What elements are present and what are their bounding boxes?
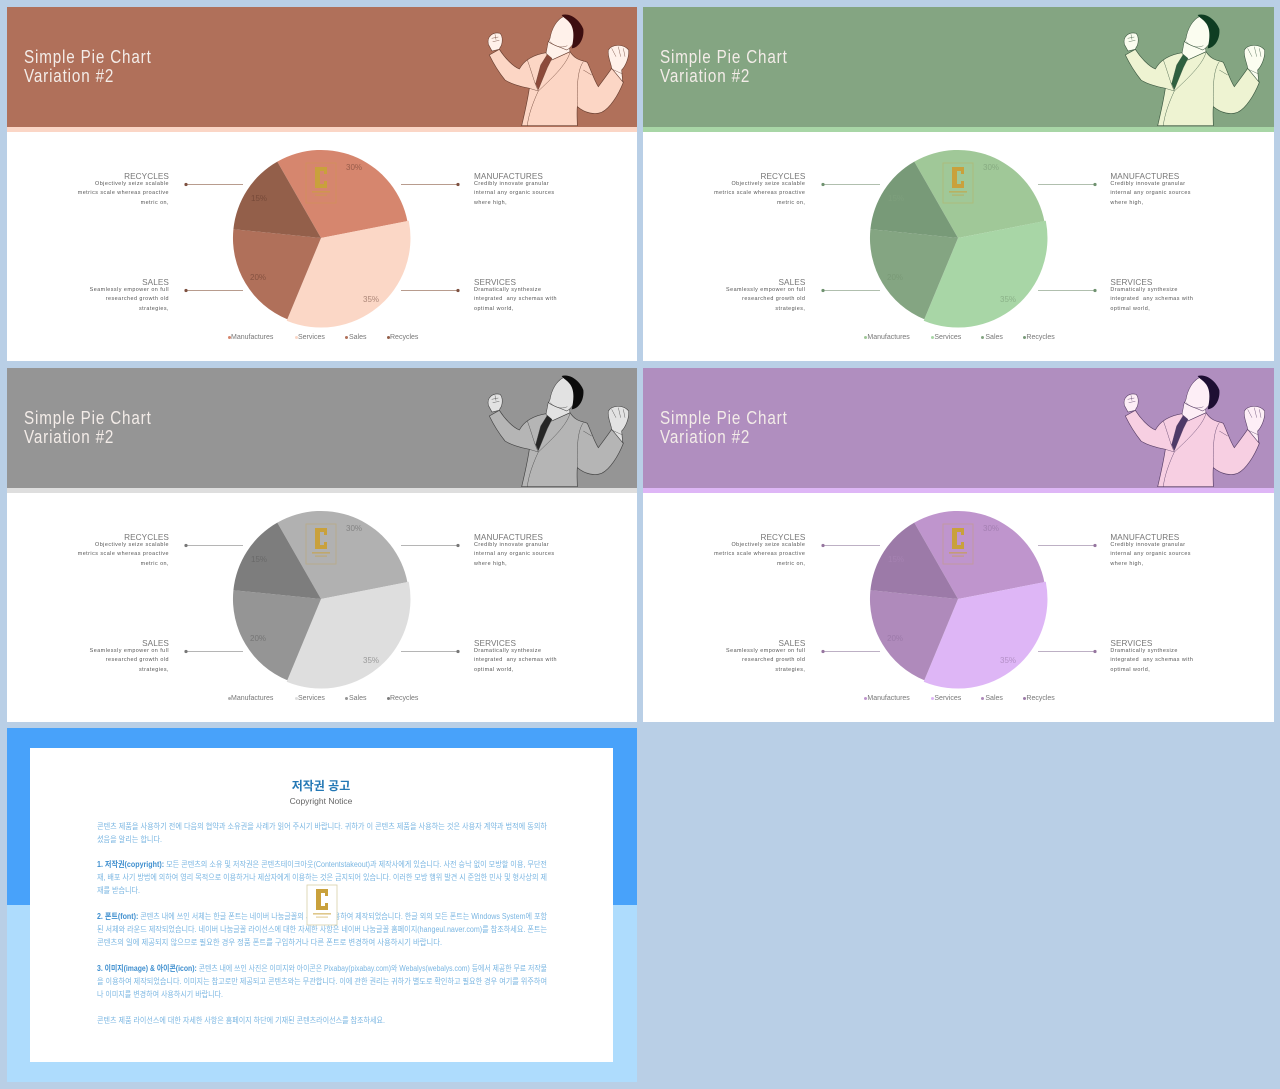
label: services: optimal world, bbox=[474, 666, 514, 672]
label: sales: Seamlessly empower on full bbox=[90, 648, 169, 654]
label: manufactures: Credibly innovate granular bbox=[474, 542, 549, 548]
pie chart: 15% bbox=[251, 194, 267, 203]
label: sales: strategies, bbox=[775, 306, 805, 312]
label: services: integrated any schemas with bbox=[474, 657, 557, 663]
accent strip bbox=[7, 127, 637, 132]
label: recycles bbox=[714, 533, 805, 566]
label: manufactures: Credibly innovate granular bbox=[474, 180, 549, 186]
pie chart bbox=[821, 511, 1097, 688]
label: services: integrated any schemas with bbox=[1110, 657, 1193, 663]
legend: Recycles bbox=[390, 334, 418, 340]
label: manufactures: where high, bbox=[474, 200, 507, 206]
label: sales: strategies, bbox=[775, 666, 805, 672]
pie chart: 30% bbox=[346, 524, 362, 533]
label: services: SERVICES bbox=[1110, 278, 1152, 287]
copyright card: 재를 받습니다. bbox=[97, 885, 140, 895]
accent strip bbox=[7, 488, 637, 493]
legend: Manufactures bbox=[231, 694, 273, 702]
copyright card: 나 이미지를 변경하여 사용하시기 바랍니다. bbox=[97, 989, 223, 999]
copyright card bbox=[30, 748, 613, 1062]
title: Variation #2 bbox=[660, 426, 750, 446]
label: services bbox=[474, 278, 557, 312]
label: services bbox=[474, 639, 557, 672]
legend: Sales bbox=[349, 334, 367, 340]
label: manufactures: Credibly innovate granular bbox=[1110, 542, 1186, 548]
label: manufactures: Credibly innovate granular bbox=[1110, 180, 1186, 186]
label: manufactures: MANUFACTURES bbox=[1110, 172, 1179, 181]
label: services: Dramatically synthesize bbox=[1110, 648, 1178, 654]
copyright card: 3. 이미지(image) & 아이콘(icon): 콘텐츠 내에 쓰인 사진은 이미지와 아이콘은 Pixabay(pixabay.com)와 Webalys(webalys.com) 등에서 제공한 무료 저작물 bbox=[97, 963, 547, 973]
label: recycles: metric on, bbox=[777, 200, 805, 206]
label: services: optimal world, bbox=[1110, 306, 1150, 312]
pie chart bbox=[184, 150, 460, 328]
panel: brown pie chart slide bbox=[7, 7, 637, 361]
label: sales: Seamlessly empower on full bbox=[726, 286, 805, 292]
copyright card: 셨음을 알리는 합니다. bbox=[97, 834, 162, 844]
label: sales: Seamlessly empower on full bbox=[90, 286, 169, 292]
legend: Sales bbox=[985, 694, 1003, 702]
label: sales: researched growth old bbox=[106, 296, 169, 302]
copyright card: 2. 폰트(font): 콘텐츠 내에 쓰인 서체는 한글 폰트는 네이버 나눔글꼴의 서체를 이용하여 제작되었습니다. 한글 외의 모든 폰트는 Windows System에 포함 bbox=[97, 911, 548, 921]
header band bbox=[7, 7, 637, 127]
title bbox=[660, 46, 788, 86]
pie chart: 30% bbox=[346, 163, 362, 172]
label: recycles: metrics scale whereas proactive bbox=[714, 551, 805, 557]
label: recycles: Objectively seize scalable bbox=[95, 542, 169, 548]
label: manufactures: where high, bbox=[1110, 200, 1143, 206]
pie chart: 35% bbox=[1000, 295, 1016, 304]
label: manufactures: internal any organic sources bbox=[1110, 551, 1191, 557]
panel: copyright notice bbox=[7, 728, 637, 1082]
label: manufactures: internal any organic sources bbox=[474, 551, 555, 557]
label: manufactures: internal any organic sources bbox=[474, 190, 555, 196]
label: recycles: Objectively seize scalable bbox=[95, 180, 169, 186]
copyright card: 콘텐츠 제품을 사용하기 전에 다음의 협약과 소유권을 사례가 읽어 주시기 바랍니다. 귀하가 이 콘텐츠 제품을 사용하는 것은 사용자 계약과 법적에 동의하 bbox=[97, 821, 548, 831]
pie chart: 15% bbox=[888, 555, 904, 564]
label: services bbox=[1110, 278, 1193, 312]
pie chart: 35% bbox=[1000, 656, 1016, 665]
panel: gray pie chart slide bbox=[7, 368, 637, 722]
label: services: Dramatically synthesize bbox=[474, 648, 541, 654]
panel: green pie chart slide bbox=[643, 7, 1274, 361]
label: recycles: Objectively seize scalable bbox=[731, 542, 805, 548]
header band bbox=[7, 368, 637, 488]
label: manufactures bbox=[474, 172, 555, 206]
legend bbox=[864, 334, 1055, 340]
legend: Services bbox=[934, 694, 961, 702]
label: recycles: RECYCLES bbox=[760, 172, 805, 181]
label: sales: SALES bbox=[778, 639, 805, 648]
label: services: integrated any schemas with bbox=[1110, 296, 1193, 302]
label: sales: researched growth old bbox=[106, 657, 169, 663]
title: Simple Pie Chart bbox=[24, 46, 151, 66]
label: sales: SALES bbox=[142, 278, 169, 287]
legend: Recycles bbox=[1026, 694, 1055, 702]
panel: purple pie chart slide bbox=[643, 368, 1274, 722]
label: recycles: Objectively seize scalable bbox=[731, 180, 805, 186]
pie chart: 30% bbox=[983, 163, 999, 172]
legend: Manufactures bbox=[231, 334, 273, 340]
accent strip bbox=[643, 127, 1274, 132]
label: manufactures: where high, bbox=[1110, 560, 1143, 566]
label: recycles: RECYCLES bbox=[124, 533, 169, 542]
label: recycles: metrics scale whereas proactive bbox=[78, 551, 169, 557]
copyright card: 을 이용하여 제작되었습니다. 이미지는 참고로만 제공되고 콘텐츠와는 무관합니다. 이에 관한 권리는 귀하가 별도로 확인하고 필요한 경우 여기를 위주하여 bbox=[97, 976, 547, 986]
legend: Services bbox=[298, 694, 325, 702]
label: services: SERVICES bbox=[1110, 639, 1152, 648]
label: services: Dramatically synthesize bbox=[474, 286, 541, 292]
pie chart: 20% bbox=[250, 634, 266, 643]
pie chart bbox=[184, 511, 460, 688]
legend: Sales bbox=[349, 694, 367, 702]
label: manufactures bbox=[1110, 533, 1191, 566]
legend bbox=[864, 694, 1055, 702]
copyright card: 콘텐츠 제품 라이선스에 대한 자세한 사항은 홈페이지 하단에 기재된 콘텐츠라이선스를 참조하세요. bbox=[97, 1015, 385, 1025]
blue upper background bbox=[7, 728, 637, 905]
label: sales bbox=[90, 278, 169, 312]
label: sales: researched growth old bbox=[742, 296, 805, 302]
pie chart: 35% bbox=[363, 656, 379, 665]
title: Variation #2 bbox=[660, 66, 750, 86]
label: recycles: RECYCLES bbox=[124, 172, 169, 181]
label: recycles bbox=[714, 172, 805, 206]
pie chart bbox=[821, 150, 1097, 328]
label: recycles: metric on, bbox=[141, 560, 169, 566]
legend: Sales bbox=[985, 334, 1003, 340]
legend bbox=[228, 694, 418, 702]
pie chart: 15% bbox=[251, 555, 267, 564]
legend: Services bbox=[298, 334, 325, 340]
copyright card: 1. 저작권(copyright): 모든 콘텐츠의 소유 및 저작권은 콘텐츠테이크아웃(Contentstakeout)과 제작사에게 있습니다. 사전 승낙 없이 모방할 이용, 무단전 bbox=[97, 859, 547, 869]
label: sales: SALES bbox=[778, 278, 805, 287]
title: Simple Pie Chart bbox=[24, 408, 151, 428]
label: recycles: metric on, bbox=[777, 560, 805, 566]
header band bbox=[643, 7, 1274, 127]
title: Simple Pie Chart bbox=[660, 46, 788, 66]
label: services: SERVICES bbox=[474, 639, 516, 648]
label: services: integrated any schemas with bbox=[474, 296, 557, 302]
copyright card: 된 서체와 라운드 제작되었습니다. 네이버 나눔글꼴 라이선스에 대한 자세한 사항은 네이버 나눔글꼴 홈페이지(hangeul.naver.com)를 참조하세요. 폰트는 bbox=[97, 924, 547, 934]
label: services bbox=[1110, 639, 1193, 672]
label: sales bbox=[726, 278, 805, 312]
label: sales: strategies, bbox=[139, 666, 169, 672]
copyright card: 저작권 공고 bbox=[292, 778, 350, 793]
legend: Services bbox=[934, 334, 961, 340]
label: manufactures: MANUFACTURES bbox=[1110, 533, 1179, 542]
label: recycles bbox=[78, 533, 169, 566]
pie chart: 15% bbox=[888, 194, 904, 203]
header band bbox=[643, 368, 1274, 488]
label: services: SERVICES bbox=[474, 278, 516, 287]
label: manufactures: MANUFACTURES bbox=[474, 533, 543, 542]
label: recycles: RECYCLES bbox=[760, 533, 805, 542]
label: manufactures: internal any organic sources bbox=[1110, 190, 1191, 196]
illustration: cheering businessman bbox=[488, 14, 629, 126]
title bbox=[24, 46, 151, 86]
legend bbox=[228, 334, 418, 340]
label: recycles: metric on, bbox=[141, 200, 169, 206]
title: Simple Pie Chart bbox=[660, 408, 788, 428]
label: sales: Seamlessly empower on full bbox=[726, 648, 805, 654]
label: recycles bbox=[78, 172, 169, 206]
legend: Recycles bbox=[390, 694, 418, 702]
label: sales: SALES bbox=[142, 639, 169, 648]
label: services: Dramatically synthesize bbox=[1110, 286, 1178, 292]
copyright card: 콘텐츠의 일에 제공되지 않으므로 필요한 경우 정품 폰트를 구입하거나 다른 폰트로 변경하여 사용하시기 바랍니다. bbox=[97, 937, 442, 947]
legend: Recycles bbox=[1026, 334, 1055, 340]
label: recycles: metrics scale whereas proactive bbox=[714, 190, 805, 196]
pie chart: 20% bbox=[887, 634, 903, 643]
title: Variation #2 bbox=[24, 426, 114, 446]
pie chart: 30% bbox=[983, 524, 999, 533]
pie chart: 20% bbox=[250, 273, 266, 282]
legend: Manufactures bbox=[867, 694, 910, 702]
label: services: optimal world, bbox=[1110, 666, 1150, 672]
label: sales bbox=[726, 639, 805, 672]
label: services: optimal world, bbox=[474, 306, 514, 312]
title bbox=[24, 408, 151, 446]
label: recycles: metrics scale whereas proactive bbox=[78, 190, 169, 196]
label: sales bbox=[90, 639, 169, 672]
pie chart: 20% bbox=[887, 273, 903, 282]
label: manufactures bbox=[1110, 172, 1191, 206]
copyright card: 재, 배포 사기 방법에 의하여 영리 목적으로 이용하거나 제삼자에게 이용하는 것은 금지되어 있습니다. 이러한 모방 행위 발견 시 준엄한 민사 및 형사상의 제 bbox=[97, 872, 547, 882]
label: sales: strategies, bbox=[139, 306, 169, 312]
illustration: cheering businessman bbox=[1124, 376, 1265, 487]
illustration: cheering businessman bbox=[1124, 14, 1265, 126]
accent strip bbox=[643, 488, 1274, 493]
title bbox=[660, 408, 788, 446]
label: manufactures bbox=[474, 533, 555, 566]
label: sales: researched growth old bbox=[742, 657, 805, 663]
illustration: cheering businessman bbox=[488, 376, 629, 487]
label: manufactures: where high, bbox=[474, 560, 507, 566]
title: Variation #2 bbox=[24, 66, 114, 86]
label: manufactures: MANUFACTURES bbox=[474, 172, 543, 181]
legend: Manufactures bbox=[867, 334, 910, 340]
copyright card: Copyright Notice bbox=[290, 796, 353, 806]
pie chart: 35% bbox=[363, 295, 379, 304]
